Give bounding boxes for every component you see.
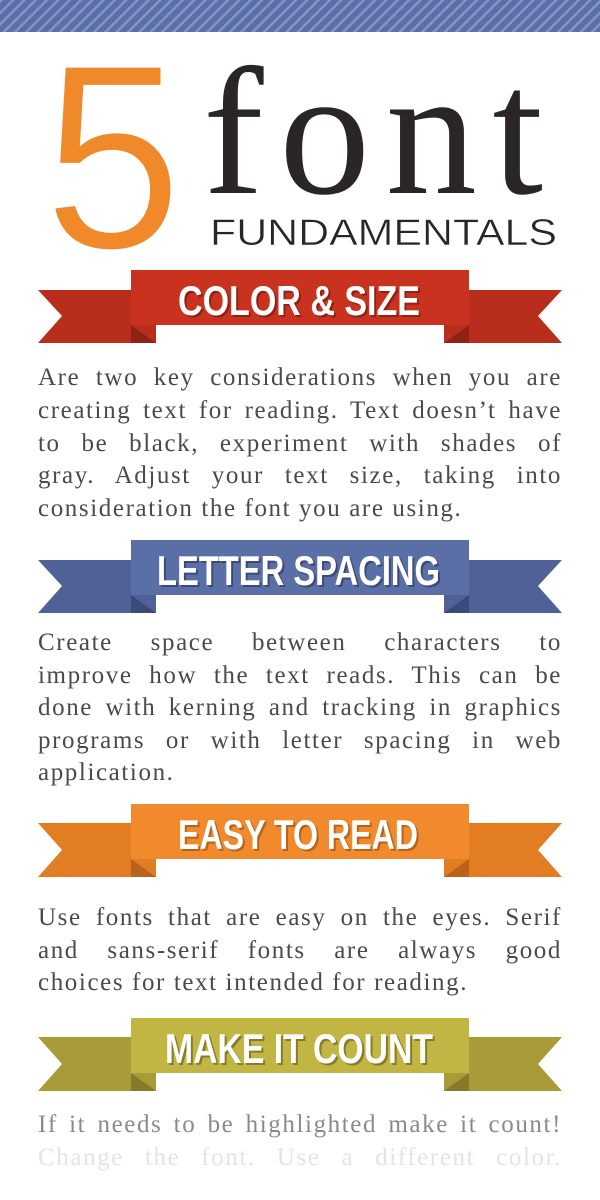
text block: color & size: consideration the font you are using. bbox=[38, 495, 462, 522]
text block: easy to read: Use fonts that are easy on the eyes. Serif bbox=[38, 904, 562, 931]
text block: letter spacing: application. bbox=[38, 759, 175, 786]
text block: color & size: Are two key considerations when you are bbox=[38, 364, 562, 391]
text block: color & size: to be black, experiment with shades of bbox=[38, 430, 562, 457]
text block: letter spacing: done with kerning and tracking in graphics bbox=[38, 694, 562, 721]
text block: letter spacing: improve how the text reads. This can be bbox=[38, 662, 562, 689]
ribbon: easy to read bbox=[38, 804, 562, 877]
text block: easy to read: choices for text intended for reading. bbox=[38, 969, 468, 996]
title: big number 5: 5 bbox=[44, 9, 182, 304]
text block: easy to read: and sans-serif fonts are always good bbox=[38, 937, 562, 964]
ribbon: letter spacing: LETTER SPACING bbox=[157, 547, 440, 594]
ribbon: easy to read: EASY TO READ bbox=[180, 813, 420, 860]
ribbon: easy to read: EASY TO READ bbox=[178, 811, 418, 858]
ribbon: color & size: COLOR & SIZE bbox=[178, 277, 420, 324]
text block: letter spacing: programs or with letter spacing in web bbox=[38, 727, 562, 754]
ribbon: color & size: COLOR & SIZE bbox=[180, 279, 422, 326]
text block: color & size: creating text for reading. Text doesn’t have bbox=[38, 397, 562, 424]
text block: make it count (fading): Change the font. Use a different color. bbox=[38, 1144, 562, 1171]
text block: color & size: gray. Adjust your text size, taking into bbox=[38, 462, 562, 489]
ribbon: make it count: MAKE IT COUNT bbox=[167, 1027, 435, 1074]
ribbon: make it count: MAKE IT COUNT bbox=[165, 1025, 433, 1072]
title: FUNDAMENTALS: FUNDAMENTALS bbox=[210, 212, 557, 253]
ribbon: letter spacing bbox=[38, 540, 562, 613]
header stripe band bbox=[0, 0, 600, 32]
ribbon: color & size bbox=[38, 270, 562, 343]
title: font: font bbox=[203, 32, 543, 233]
text block: letter spacing: Create space between characters to bbox=[38, 629, 562, 656]
ribbon: letter spacing: LETTER SPACING bbox=[159, 549, 442, 596]
ribbon: make it count bbox=[38, 1018, 562, 1091]
text block: make it count (fading): If it needs to be highlighted make it count! bbox=[38, 1111, 562, 1138]
